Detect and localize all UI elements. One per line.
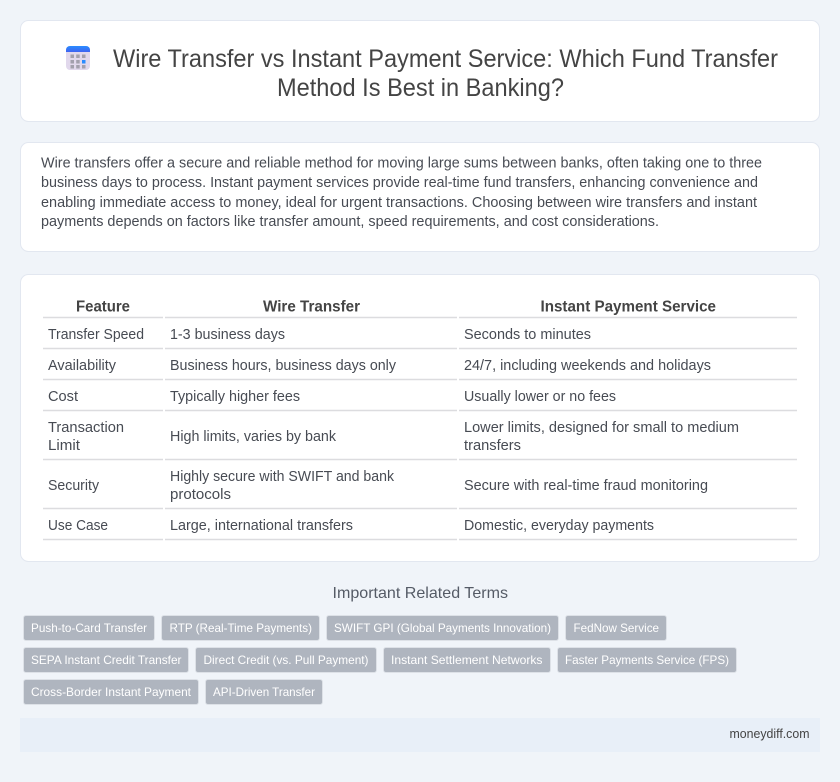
- tag: Direct Credit (vs. Pull Payment): [204, 653, 369, 667]
- text block: description: payments depends on factors like transfer amount, speed requirements, and cost considerations.: [41, 214, 659, 230]
- row: transaction limit: [48, 420, 739, 454]
- row: availability: Availability: [48, 358, 117, 374]
- tag: [206, 680, 322, 704]
- tag: [566, 616, 666, 640]
- row: use case: Domestic, everyday payments: [464, 518, 654, 534]
- row: security: Secure with real-time fraud monitoring: [464, 478, 708, 494]
- title: Wire Transfer vs Instant Payment Service: Which Fund Transfer: [113, 45, 778, 73]
- icon: calendar: [66, 46, 90, 70]
- tag: Faster Payments Service (FPS): [565, 653, 729, 667]
- row: cost: Cost: [48, 389, 78, 405]
- tag: [162, 616, 320, 640]
- text block: description: business days to process. Instant payment services provide real-time fund transfers, enhancing convenience and: [41, 175, 758, 191]
- row: security: Security: [48, 478, 100, 494]
- row: cost: Typically higher fees: [170, 389, 300, 405]
- table header: Feature: [76, 298, 130, 315]
- panel: description: [20, 142, 820, 252]
- row: security: Highly secure with SWIFT and bank: [170, 469, 395, 485]
- row: transaction limit: transfers: [464, 438, 521, 454]
- row: use case: Large, international transfers: [170, 518, 353, 534]
- tag: SWIFT GPI (Global Payments Innovation): [334, 621, 551, 635]
- table header: Instant Payment Service: [540, 298, 716, 315]
- heading: important related terms: Important Related Terms: [332, 585, 508, 602]
- tag: [24, 616, 154, 640]
- row: transaction limit: Limit: [48, 438, 80, 454]
- tag: FedNow Service: [574, 621, 659, 635]
- row: transfer speed: Transfer Speed: [48, 327, 144, 343]
- panel: comparison table: [20, 274, 820, 562]
- row: use case: Use Case: [48, 518, 108, 534]
- tag: Cross-Border Instant Payment: [31, 685, 192, 699]
- tag: API-Driven Transfer: [213, 685, 315, 699]
- title: [113, 45, 778, 102]
- title: Method Is Best in Banking?: [277, 74, 564, 102]
- text block: description: [41, 156, 762, 230]
- tag: RTP (Real-Time Payments): [170, 621, 312, 635]
- row: transaction limit: High limits, varies by bank: [170, 429, 337, 445]
- table header: Wire Transfer: [263, 298, 360, 315]
- row: transfer speed: 1-3 business days: [170, 327, 285, 343]
- tag: SEPA Instant Credit Transfer: [31, 653, 182, 667]
- row: cost: Usually lower or no fees: [464, 389, 616, 405]
- text block: description: Wire transfers offer a secure and reliable method for moving large sums between banks, often taking one to three: [41, 156, 762, 172]
- row: availability: [48, 358, 711, 374]
- row: use case: [48, 518, 654, 534]
- row: security: protocols: [170, 487, 231, 503]
- row: availability: Business hours, business days only: [170, 358, 397, 374]
- tag: [24, 680, 198, 704]
- tag: [326, 616, 558, 640]
- row: transaction limit: Lower limits, designed for small to medium: [464, 420, 739, 436]
- row: cost: [48, 389, 616, 405]
- row: transaction limit: Transaction: [48, 420, 124, 436]
- row: security: [48, 469, 708, 503]
- row: availability: 24/7, including weekends and holidays: [464, 358, 711, 374]
- tag: [24, 648, 188, 672]
- tag: [384, 648, 550, 672]
- tag: [558, 648, 736, 672]
- tag: Instant Settlement Networks: [391, 653, 542, 667]
- footer: [20, 718, 820, 752]
- footer: moneydiff.com: [730, 727, 810, 741]
- tag: [196, 648, 376, 672]
- panel: related term tags: [24, 616, 736, 704]
- tag: Push-to-Card Transfer: [31, 621, 147, 635]
- row: transfer speed: Seconds to minutes: [464, 327, 591, 343]
- table header: [76, 298, 716, 315]
- text block: description: enabling immediate access to money, ideal for urgent transactions. Choosing between wire transfers and instant: [41, 195, 757, 211]
- row: transfer speed: [48, 327, 591, 343]
- panel: title card: [20, 20, 820, 122]
